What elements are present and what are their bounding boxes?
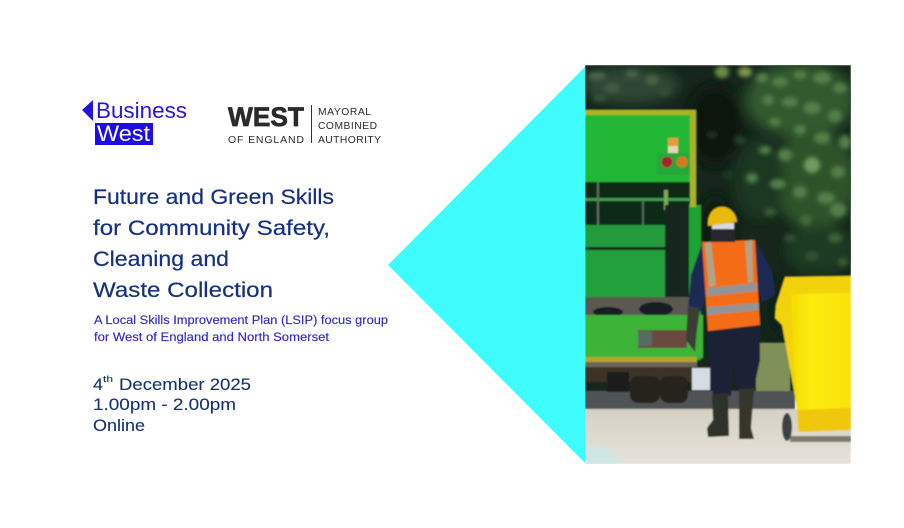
- background grass: [756, 343, 790, 391]
- garbage truck: [585, 110, 710, 403]
- truck wheels: [607, 372, 629, 392]
- title: Waste Collection: [93, 278, 273, 302]
- West of England Mayoral Combined Authority logo: [228, 102, 381, 146]
- time: 1.00pm - 2.00pm: [93, 395, 236, 414]
- worker trousers: [707, 326, 760, 396]
- hard hat: [708, 207, 737, 226]
- subtitle: for West of England and North Somerset: [94, 330, 330, 344]
- truck lower sections: [585, 225, 665, 247]
- logo line: OF ENGLAND: OF ENGLAND: [228, 134, 304, 146]
- logo word: West: West: [97, 121, 150, 146]
- bags under truck: [692, 368, 710, 390]
- logo word: WEST: WEST: [228, 102, 304, 132]
- truck right post: [689, 205, 701, 360]
- logo text: Mayoral Combined Authority: COMBINED: [318, 121, 377, 132]
- logo text: Mayoral Combined Authority: AUTHORITY: [318, 135, 381, 146]
- title: for Community Safety,: [93, 216, 330, 240]
- date: 4: [93, 375, 103, 394]
- worker: [686, 207, 775, 439]
- title: Future and Green Skills: [93, 185, 334, 209]
- hi-vis vest: [702, 240, 760, 331]
- road: [585, 391, 795, 409]
- truck bumper: [585, 315, 703, 358]
- logo text: Mayoral Combined Authority: [318, 107, 381, 146]
- bin shadow: [790, 436, 851, 442]
- logo divider: [311, 105, 312, 143]
- title: Cleaning and: [93, 247, 229, 271]
- ground shadow: [585, 445, 625, 464]
- icon: logo arrow: [82, 100, 93, 121]
- truck hopper opening: [585, 182, 689, 225]
- yellow wheelie bin: [775, 276, 851, 441]
- logo word: Business: Business: [96, 98, 187, 123]
- truck upper panel: [585, 110, 694, 182]
- rubbish bags: [585, 297, 693, 315]
- worker arms: [688, 241, 708, 312]
- neck and cap: [711, 224, 735, 242]
- subtitle: [94, 313, 388, 344]
- event details: [93, 374, 251, 435]
- date: December 2025: [119, 375, 251, 394]
- location: Online: [93, 416, 145, 435]
- photo: waste collection worker with truck and bin: [580, 62, 857, 464]
- truck lights: [657, 153, 690, 175]
- foliage background: [580, 62, 857, 395]
- subtitle: A Local Skills Improvement Plan (LSIP) focus group: [94, 313, 388, 327]
- cyan triangle: [388, 67, 585, 463]
- logo text: Mayoral Combined Authority: MAYORAL: [318, 107, 371, 118]
- worker boots: [707, 393, 729, 437]
- title: [93, 185, 334, 302]
- date: th: [103, 374, 113, 384]
- concrete ground: [585, 409, 851, 464]
- Business West logo: [82, 98, 187, 146]
